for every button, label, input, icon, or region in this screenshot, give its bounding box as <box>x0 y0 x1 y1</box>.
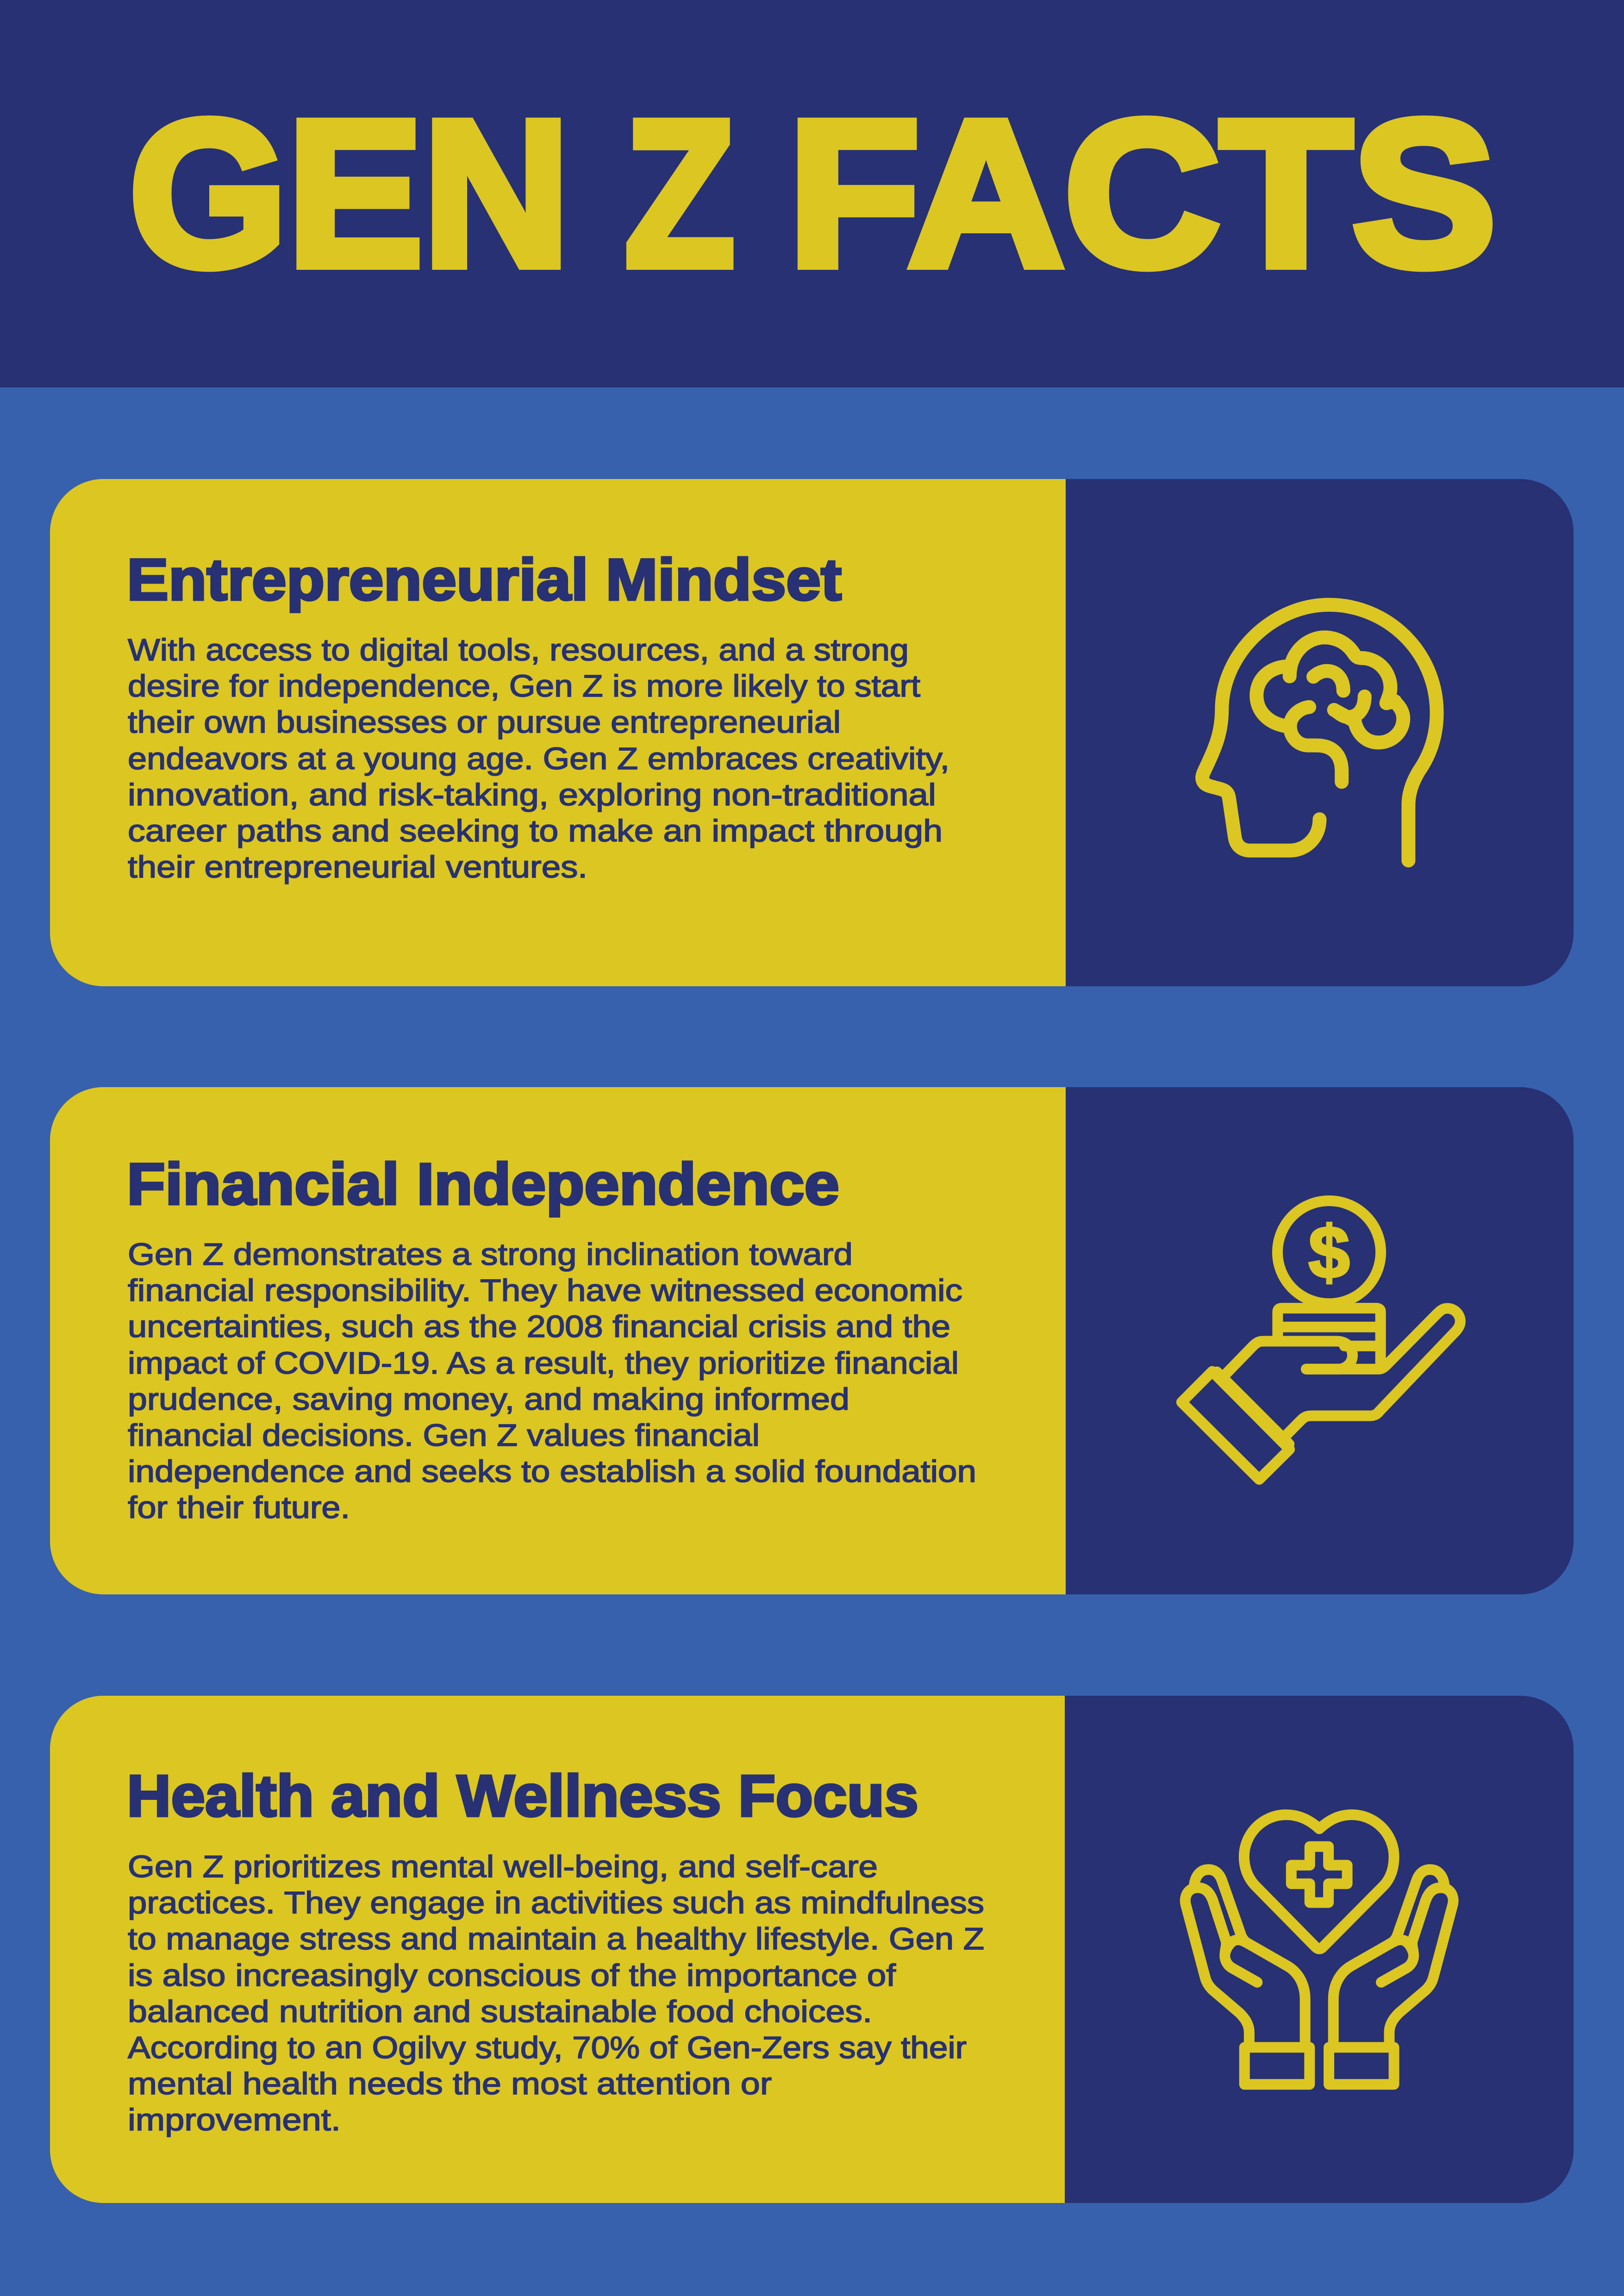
heading: health and wellness focus: Health and Wellness Focus <box>127 1763 918 1829</box>
text block: health and wellness focus: According to an Ogilvy study, 70% of Gen-Zers say their <box>128 2030 967 2065</box>
text block: financial independence: independence and seeks to establish a solid foundation <box>128 1454 976 1489</box>
text block: entrepreneurial mindset: innovation, and risk-taking, exploring non-traditional <box>128 778 936 812</box>
text block: financial independence: prudence, saving money, and making informed <box>128 1382 849 1417</box>
text block: financial independence: uncertainties, such as the 2008 financial crisis and the <box>128 1309 950 1344</box>
text block: health and wellness focus <box>128 1849 984 2137</box>
text block: health and wellness focus: mental health needs the most attention or <box>128 2066 772 2101</box>
text block: entrepreneurial mindset: their own businesses or pursue entrepreneurial <box>128 705 841 740</box>
text block: entrepreneurial mindset: endeavors at a young age. Gen Z embraces creativity, <box>128 741 949 776</box>
text block: health and wellness focus: balanced nutrition and sustainable food choices. <box>128 1994 872 2029</box>
title <box>129 78 1496 310</box>
title: FACTS <box>788 78 1496 310</box>
text block: health and wellness focus: Gen Z prioritizes mental well-being, and self-care <box>128 1849 878 1884</box>
text block: financial independence: financial decisions. Gen Z values financial <box>128 1418 760 1453</box>
panel: entrepreneurial mindset <box>50 479 1574 986</box>
title: Z <box>625 78 735 310</box>
text block: financial independence: financial responsibility. They have witnessed economic <box>128 1273 962 1308</box>
icon: head with brain <box>1202 605 1437 860</box>
text block: entrepreneurial mindset: their entrepreneurial ventures. <box>128 850 587 884</box>
text block: entrepreneurial mindset: With access to digital tools, resources, and a strong <box>128 633 909 667</box>
text block: entrepreneurial mindset: desire for independence, Gen Z is more likely to start <box>128 669 920 703</box>
icon: hand holding card and coin <box>1181 1201 1460 1480</box>
icon glyph: dollar sign: $ <box>1309 1211 1349 1294</box>
text block: financial independence <box>128 1237 976 1525</box>
heading: financial independence: Financial Independence <box>127 1151 839 1217</box>
text block: health and wellness focus: to manage stress and maintain a healthy lifestyle. Gen Z <box>128 1922 984 1956</box>
panel: health and wellness focus <box>50 1696 1574 2203</box>
text block: health and wellness focus: improvement. <box>128 2103 341 2137</box>
text block: financial independence: Gen Z demonstrates a strong inclination toward <box>128 1237 853 1272</box>
text block: health and wellness focus: is also increasingly conscious of the importance of <box>128 1958 896 1993</box>
panel: financial independence <box>50 1087 1574 1594</box>
title: GEN <box>129 78 570 310</box>
heading: entrepreneurial mindset: Entrepreneurial Mindset <box>127 547 842 612</box>
icon: hands holding heart with cross <box>1185 1815 1453 2084</box>
text block: financial independence: impact of COVID-19. As a result, they prioritize financial <box>128 1346 959 1381</box>
text block: entrepreneurial mindset: career paths and seeking to make an impact through <box>128 814 943 848</box>
text block: entrepreneurial mindset <box>128 633 949 884</box>
header band with title <box>0 0 1624 387</box>
text block: health and wellness focus: practices. They engage in activities such as mindfulness <box>128 1885 984 1920</box>
text block: financial independence: for their future. <box>128 1490 350 1525</box>
